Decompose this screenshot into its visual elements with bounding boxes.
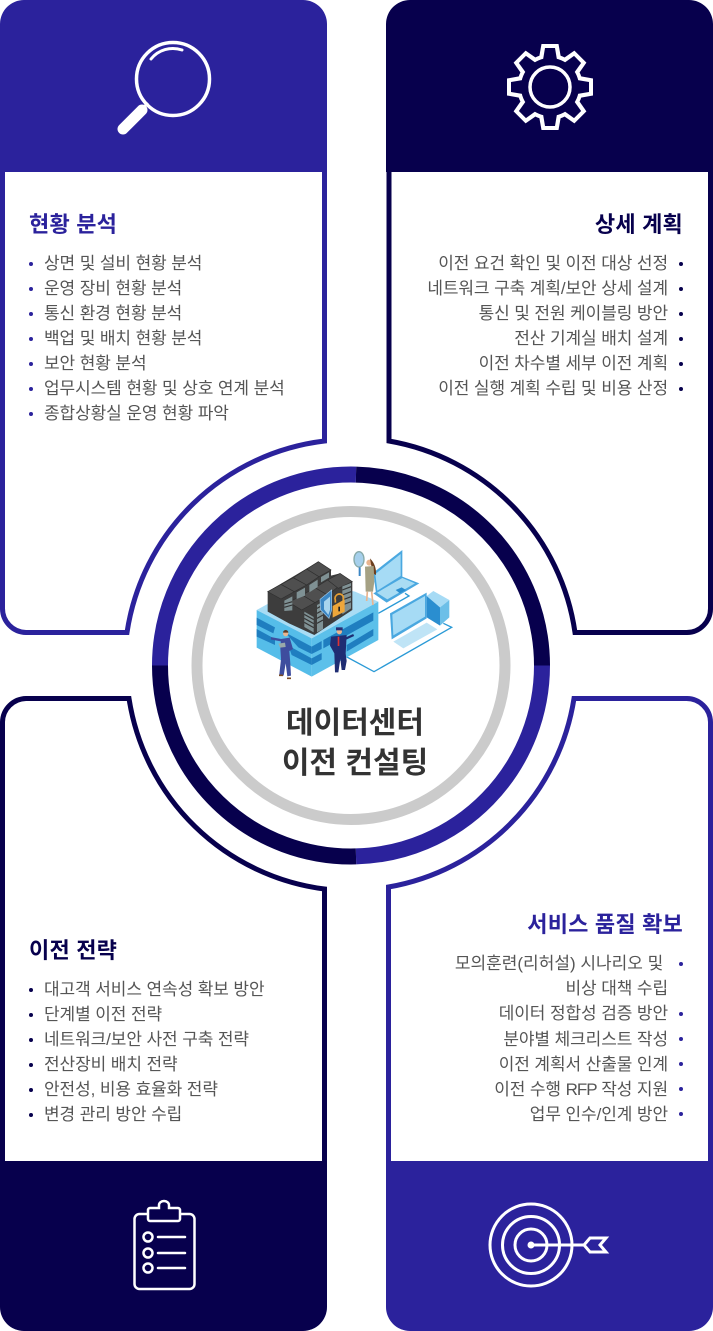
panel: 현황 분석: 통신 환경 현황 분석: [44, 304, 182, 323]
panel: 서비스 품질 확보: 이전 계획서 산출물 인계: [499, 1054, 668, 1074]
panel: 상세 계획: 이전 실행 계획 수립 및 비용 산정: [438, 379, 668, 398]
panel: 이전 전략: 변경 관리 방안 수립: [44, 1105, 182, 1124]
panel: 서비스 품질 확보: 데이터 정합성 검증 방안: [499, 1004, 668, 1023]
panel: 이전 전략: [0, 696, 327, 1331]
illustration: data center: [256, 550, 453, 680]
center title: 이전 컨설팅: [282, 747, 428, 780]
panel: 현황 분석: 상면 및 설비 현황 분석: [44, 254, 202, 273]
panel: 이전 전략: 이전 전략: [29, 938, 117, 963]
panel: 현황 분석: 종합상황실 운영 현황 파악: [44, 404, 229, 423]
panel: 서비스 품질 확보: 비상 대책 수립: [566, 979, 668, 998]
panel: 서비스 품질 확보: [386, 696, 713, 1331]
panel: 상세 계획: [386, 0, 713, 635]
panel: 이전 전략: 전산장비 배치 전략: [44, 1055, 178, 1074]
panel: 상세 계획: 네트워크 구축 계획/보안 상세 설계: [427, 279, 668, 298]
panel: 상세 계획: 이전 요건 확인 및 이전 대상 선정: [438, 254, 668, 273]
center title: 데이터센터: [286, 707, 424, 740]
panel: 이전 전략: 대고객 서비스 연속성 확보 방안: [44, 980, 265, 999]
center title: [282, 707, 428, 780]
panel: 서비스 품질 확보: 모의훈련(리허설) 시나리오 및: [455, 954, 663, 973]
panel: 상세 계획: 상세 계획: [595, 212, 683, 237]
panel: 서비스 품질 확보: 이전 수행 RFP 작성 지원: [494, 1080, 668, 1098]
panel: 현황 분석: 백업 및 배치 현황 분석: [44, 329, 202, 348]
panel: 상세 계획: 이전 차수별 세부 이전 계획: [479, 354, 668, 373]
panel: 상세 계획: 통신 및 전원 케이블링 방안: [479, 304, 668, 323]
panel: 현황 분석: [0, 0, 327, 635]
panel: 현황 분석: 현황 분석: [29, 212, 117, 237]
panel: 현황 분석: 운영 장비 현황 분석: [44, 279, 182, 298]
panel: 현황 분석: 보안 현황 분석: [44, 354, 146, 373]
panel: 이전 전략: 네트워크/보안 사전 구축 전략: [44, 1030, 249, 1049]
panel: 서비스 품질 확보: 분야별 체크리스트 작성: [503, 1030, 668, 1048]
panel: 서비스 품질 확보: 업무 인수/인계 방안: [530, 1104, 668, 1124]
panel: 상세 계획: 전산 기계실 배치 설계: [514, 329, 668, 348]
panel: 현황 분석: 업무시스템 현황 및 상호 연계 분석: [44, 379, 285, 398]
panel: 이전 전략: 안전성, 비용 효율화 전략: [44, 1080, 218, 1099]
panel: 서비스 품질 확보: 서비스 품질 확보: [527, 912, 683, 937]
panel: 이전 전략: 단계별 이전 전략: [44, 1005, 162, 1024]
